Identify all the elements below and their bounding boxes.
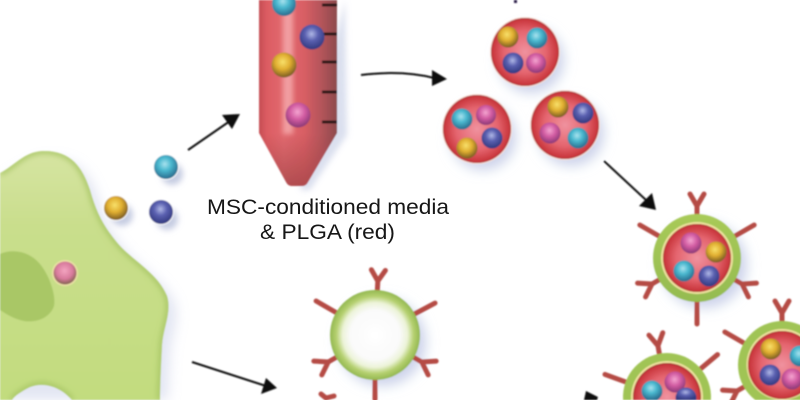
nanoparticle right: [530, 90, 600, 160]
bead: pink inside cell: [52, 260, 78, 286]
empty antibody-coated shell: [314, 270, 436, 399]
beads in tube: [272, 0, 296, 16]
coated nanoparticle: bottom: [600, 324, 719, 400]
tube scale ticks: [322, 5, 337, 122]
arrow head at bottom edge: [584, 391, 598, 400]
coated nanoparticle: centre: [638, 194, 756, 324]
nanoparticles group: [442, 17, 604, 170]
cell: green MSC with nucleus: [0, 151, 177, 400]
label: MSC-conditioned media & PLGA (red): [207, 196, 449, 244]
beads released from the cell: [103, 154, 183, 230]
nucleus: [0, 251, 54, 321]
coated nanoparticle: right: [723, 301, 800, 400]
label: MSC-conditioned media & PLGA (red): & PLGA (red): [260, 221, 395, 244]
arrow: cell to tube: [188, 114, 240, 150]
arrow: cell to empty shell: [192, 362, 277, 394]
label: MSC-conditioned media & PLGA (red): MSC-conditioned media: [207, 196, 449, 219]
nanoparticle top: [490, 17, 560, 87]
test tube with MSC-conditioned media: [259, 0, 347, 190]
arrow: nanoparticles to coated particle: [604, 161, 656, 210]
text fragment at top edge: [514, 0, 517, 3]
nanoparticle left: [442, 94, 512, 164]
arrow: tube to nanoparticles: [361, 70, 447, 86]
